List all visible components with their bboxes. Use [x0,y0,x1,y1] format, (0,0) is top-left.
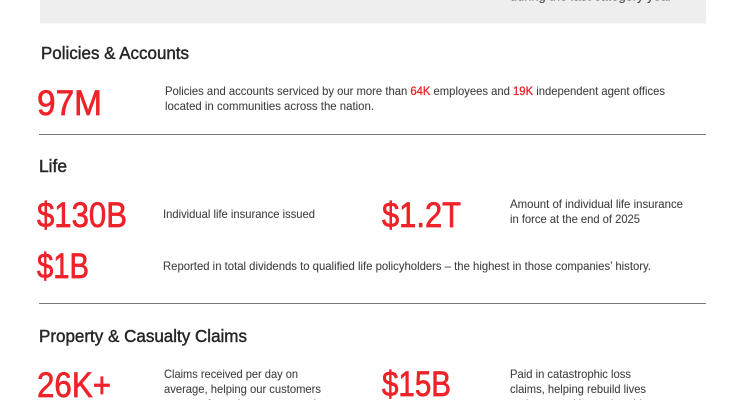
text: claims per day: average, helping our customers [164,382,321,396]
text: catastrophic claims: claims, helping rebuild lives [510,382,646,396]
section: property and casualty claims [37,326,648,400]
stat: $1.2T: $1.2T [382,196,461,235]
stat: 97M: 97M [37,84,102,123]
text: policies description: located in communities across the nation. [165,99,374,113]
panel: grey summary banner [40,0,706,24]
text: life insurance issued: Individual life insurance issued [163,207,315,221]
text: amount in force: Amount of individual life insurance [510,197,683,211]
section: life [37,156,683,286]
text: catastrophic claims [510,367,648,400]
text: dividends: Reported in total dividends to qualified life policyholders – the highest in those companies’ history. [163,259,651,273]
heading: property and casualty claims: Property & Casualty Claims [39,326,247,346]
text: catastrophic claims: Paid in catastrophic loss [510,367,631,381]
text: claims per day [164,367,321,400]
text: policies description [165,84,665,113]
text: amount in force [510,197,683,226]
text: policies description: Policies and accounts serviced by our more than 64K employees and 19K independent agent offices [165,84,665,98]
text: amount in force: in force at the end of 2025 [510,212,640,226]
heading: life: Life [39,156,67,176]
heading: policies and accounts: Policies & Accounts [41,43,189,63]
text: claims per day: Claims received per day on [164,367,298,381]
stat: $130B: $130B [37,196,127,235]
section: policies and accounts [37,43,665,123]
stat: $1B: $1B [37,247,89,286]
